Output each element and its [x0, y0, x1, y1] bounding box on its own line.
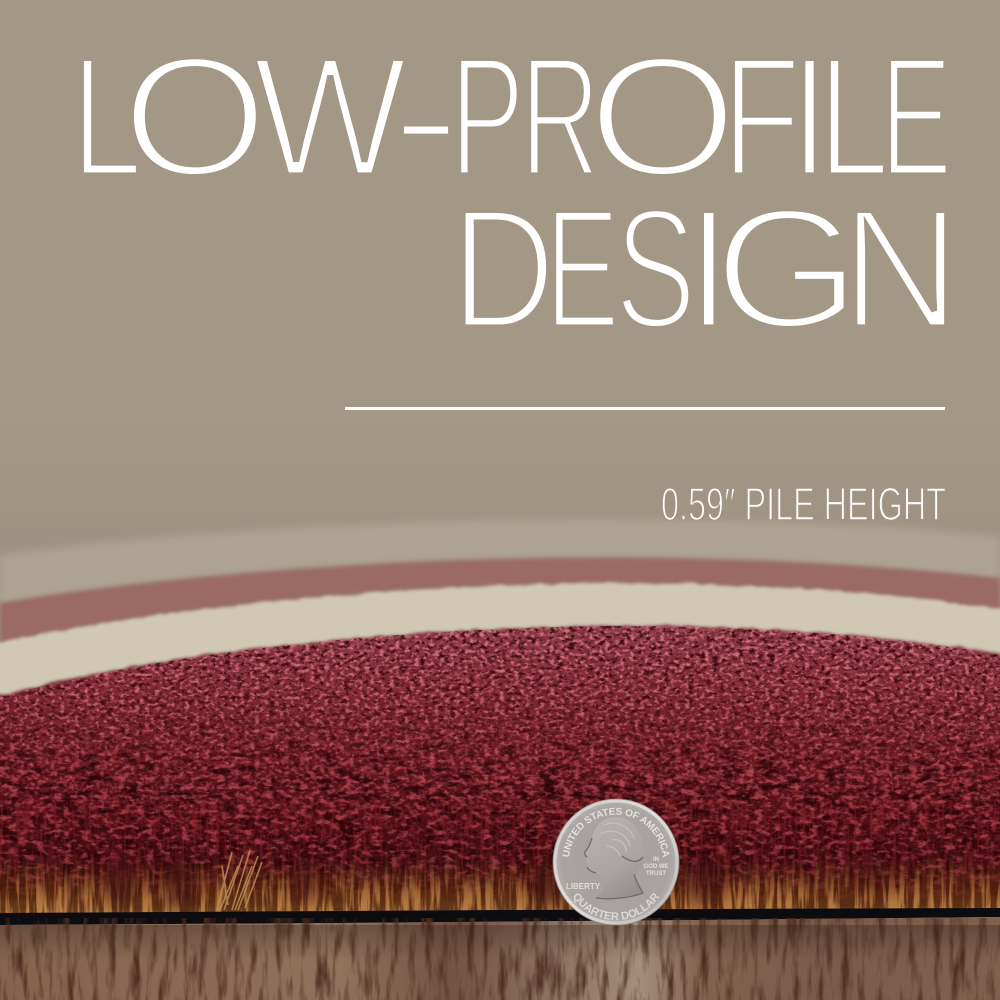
wood floor [0, 917, 1000, 1000]
rug: maroon stripe [0, 558, 1000, 645]
rug: cream stripe [0, 583, 1000, 698]
icon: quarter coin for scale: GOD WE [644, 864, 668, 870]
headline: F [722, 22, 801, 212]
divider rule [345, 407, 945, 410]
headline: L [818, 22, 890, 212]
headline: I [789, 22, 830, 212]
icon: quarter coin for scale: LIBERTY [566, 881, 600, 891]
headline: W [252, 22, 408, 212]
rug: distant beige stripe [0, 520, 1000, 605]
headline: I [686, 174, 732, 364]
headline: L [71, 22, 142, 212]
icon: quarter coin for scale [552, 798, 680, 926]
headline [71, 22, 961, 364]
taupe background [0, 0, 1000, 620]
headline: R [520, 22, 600, 212]
icon: quarter coin for scale: QUARTER DOLLAR [574, 893, 660, 920]
headline: O [588, 22, 738, 212]
rug: fringe edge with orange fibre tips [0, 800, 1000, 913]
rug: black backing edge [0, 908, 1000, 925]
icon: quarter coin for scale: IN [653, 857, 659, 863]
tuft [217, 850, 262, 910]
headline: D [451, 174, 556, 364]
rug: red pile field [0, 626, 1000, 916]
headline: G [714, 174, 861, 364]
headline: S [615, 174, 696, 364]
headline: E [545, 174, 620, 364]
icon: quarter coin for scale: TRUST [646, 871, 666, 877]
icon: quarter coin for scale: UNITED STATES OF AMERICA [562, 808, 670, 858]
headline: P [450, 22, 525, 212]
headline: E [880, 22, 952, 212]
headline: O [122, 22, 268, 212]
headline: - [390, 22, 462, 212]
headline: N [841, 174, 961, 364]
coin portrait [584, 817, 643, 899]
